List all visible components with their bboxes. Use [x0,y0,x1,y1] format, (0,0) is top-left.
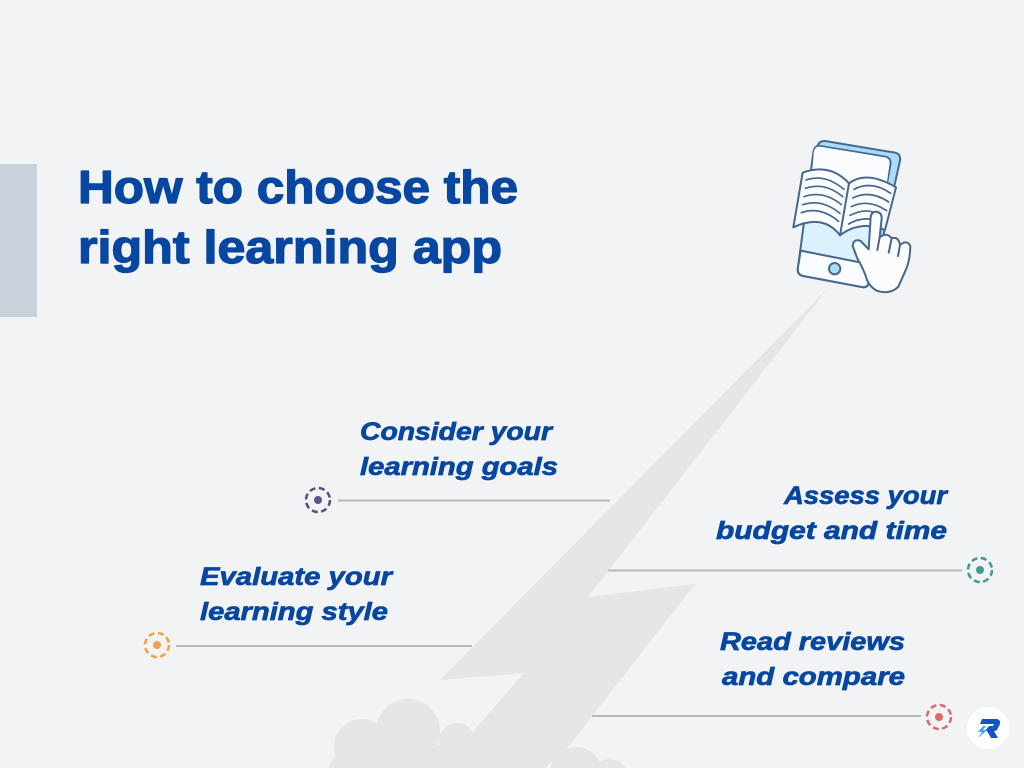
title [78,161,518,273]
icon: brand logo badge [967,707,1009,749]
title: right learning app [78,221,502,273]
callout: assess your budget and time: budget and time [716,517,947,545]
side accent bar [0,164,37,317]
callout: assess your budget and time [608,482,992,582]
callout: consider your learning goals: Consider your [360,418,553,446]
callout: read reviews and compare [592,628,951,729]
callout: evaluate your learning style: learning style [200,598,388,626]
callout: read reviews and compare: Read reviews [720,628,905,656]
callout: evaluate your learning style [145,563,472,657]
callout: consider your learning goals: learning goals [360,453,558,481]
icon: tablet with book and pointing hand [793,141,910,292]
callout: consider your learning goals [306,418,610,512]
title: How to choose the [78,161,518,213]
callout: assess your budget and time: Assess your [783,482,948,510]
callout: read reviews and compare: and compare [722,663,905,691]
lightning beam and cloud [329,288,828,768]
callout: evaluate your learning style: Evaluate your [200,563,393,591]
